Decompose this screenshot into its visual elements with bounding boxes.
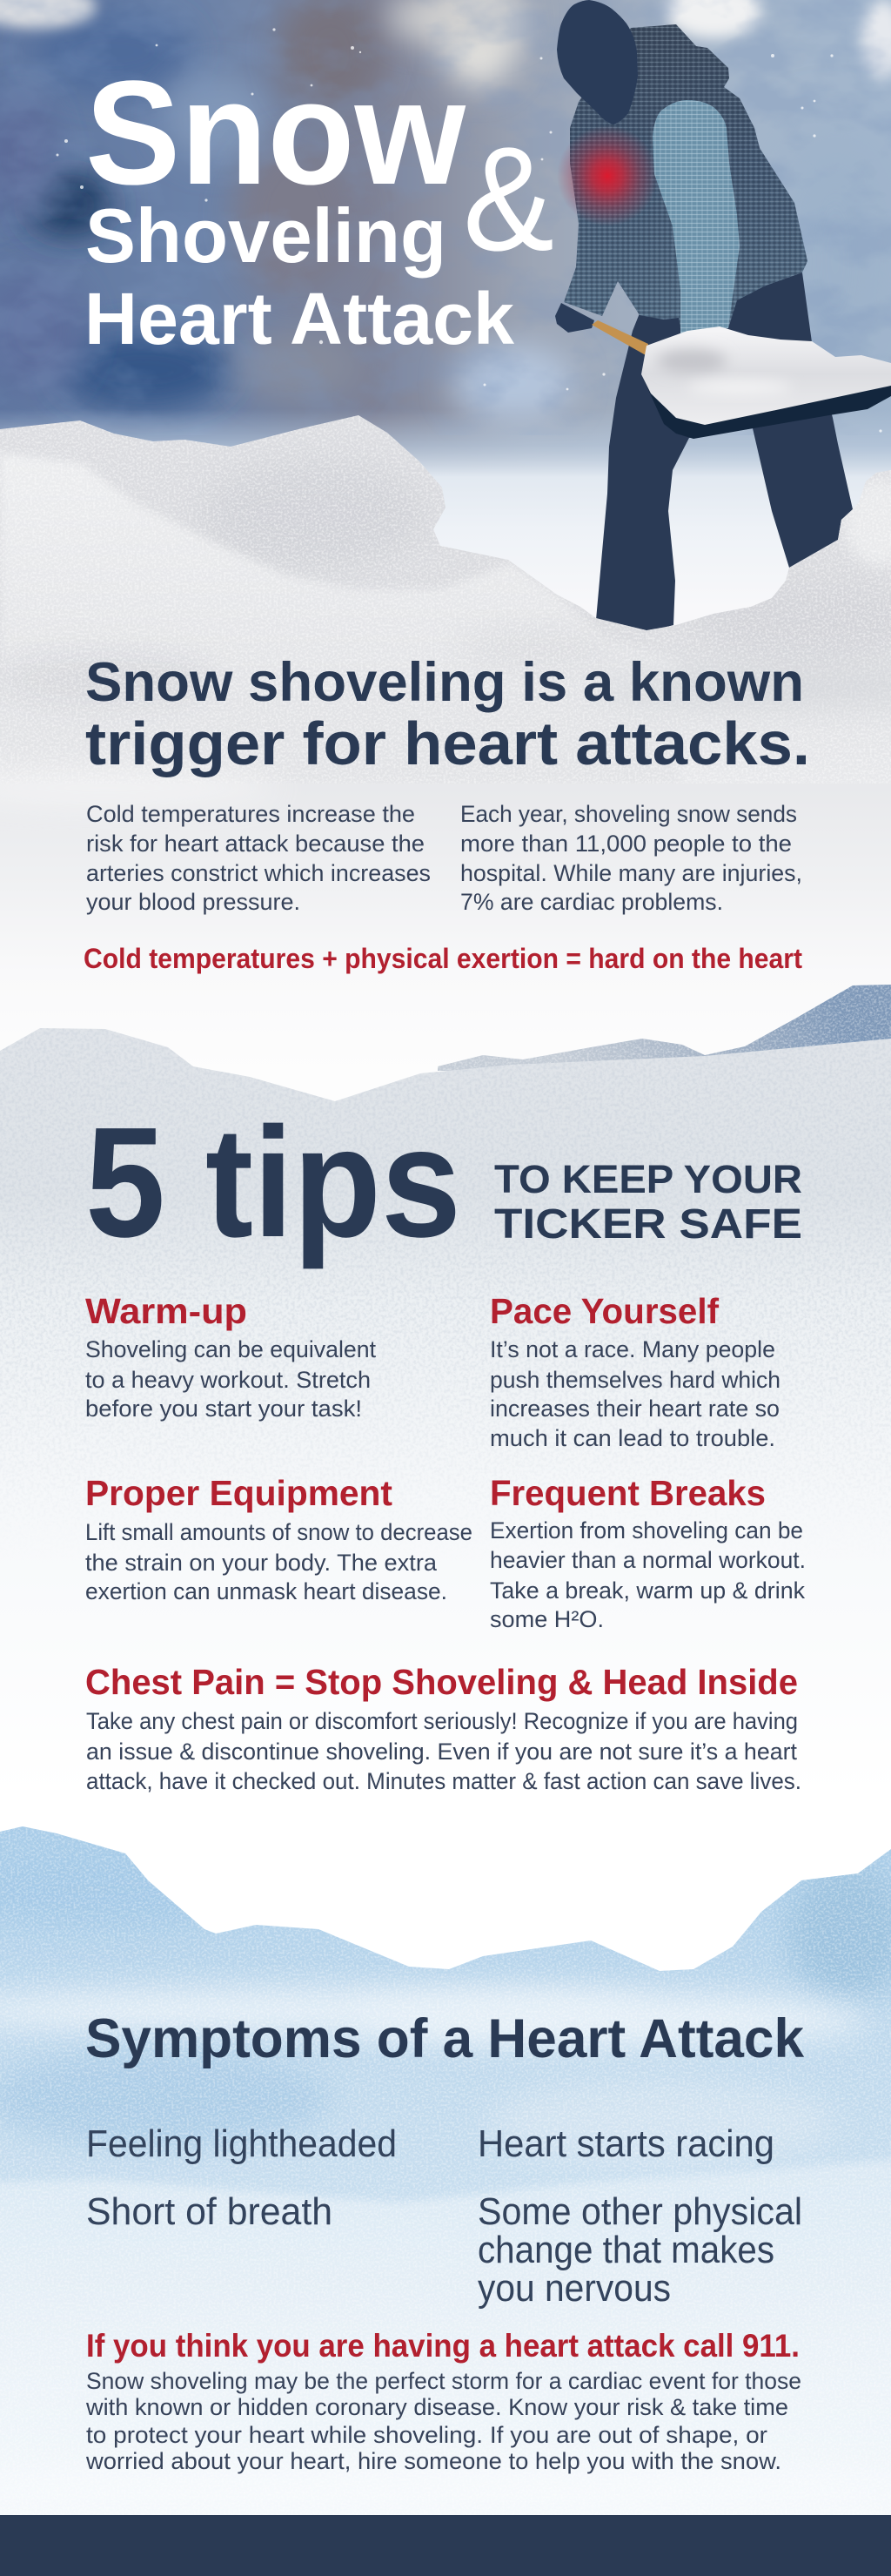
tip: chest pain: attack, have it checked out. Minutes matter & fast action can save lives. (86, 1768, 801, 1794)
tip: warm-up: Warm-up (85, 1291, 247, 1331)
red callout: call 911: If you think you are having a heart attack call 911. (86, 2328, 800, 2364)
text block: perfect storm: Snow shoveling may be the perfect storm for a cardiac event for those (86, 2368, 801, 2394)
tip: pace yourself (490, 1291, 780, 1451)
title: Shoveling (85, 192, 446, 279)
tip: warm-up: Shoveling can be equivalent (85, 1336, 377, 1362)
title (84, 50, 554, 360)
background: blurred winter sky (0, 0, 891, 662)
red callout: equation: Cold temperatures + physical exertion = hard on the heart (84, 943, 802, 974)
heading: symptoms: Symptoms of a Heart Attack (85, 2008, 805, 2069)
tip: pace yourself: It’s not a race. Many people (490, 1336, 775, 1362)
footer bar (0, 2515, 891, 2576)
tip: chest pain: Chest Pain = Stop Shoveling & Head Inside (85, 1662, 798, 1702)
tip: frequent breaks: some H²O. (490, 1606, 604, 1632)
heading: to keep your ticker safe (494, 1157, 802, 1248)
tip: frequent breaks: Take a break, warm up & drink (490, 1577, 806, 1604)
title: Heart Attack (84, 278, 514, 360)
front snow hills (0, 1028, 891, 1560)
tip: proper equipment: Lift small amounts of snow to decrease (85, 1519, 472, 1545)
text block: each year: more than 11,000 people to the (460, 831, 792, 857)
symptoms list: left: Feeling lightheaded (86, 2122, 397, 2165)
back snow hills (438, 985, 891, 1071)
shovel handle (592, 320, 648, 355)
jacket (564, 24, 807, 333)
snowflakes (56, 28, 882, 433)
shovel blade (641, 374, 891, 439)
sleeve (653, 100, 740, 333)
tip: warm-up: to a heavy workout. Stretch (85, 1367, 371, 1393)
symptoms list: right: change that makes (478, 2229, 774, 2271)
symptoms list: right: you nervous (478, 2267, 671, 2310)
text block: perfect storm: with known or hidden coronary disease. Know your risk & take time (85, 2394, 788, 2420)
glove (555, 303, 594, 333)
symptoms list: right (478, 2122, 802, 2310)
text block: perfect storm: to protect your heart while shoveling. If you are out of shape, or (86, 2422, 767, 2448)
tip: proper equipment: Proper Equipment (85, 1473, 392, 1513)
person shoveling snow (555, 0, 891, 632)
symptoms list: right: Heart starts racing (478, 2122, 774, 2165)
heading: known trigger (85, 652, 810, 777)
text block: each year: hospital. While many are injuries, (460, 860, 802, 886)
tip: frequent breaks: heavier than a normal workout. (490, 1547, 806, 1573)
heading: 5 tips: 5 tips (85, 1095, 461, 1270)
snow piles and upper snow field (0, 415, 891, 952)
tip: pace yourself: increases their heart rate so (490, 1396, 780, 1422)
text block: cold temperatures: Cold temperatures increase the (86, 801, 415, 827)
tip: proper equipment: exertion can unmask heart disease. (85, 1578, 447, 1604)
text block: each year: 7% are cardiac problems. (460, 889, 723, 915)
text block: cold temperatures: risk for heart attack because the (86, 831, 425, 857)
pants (596, 272, 853, 632)
shovel snow (641, 326, 891, 425)
tip: proper equipment (85, 1473, 472, 1604)
heading: known trigger: trigger for heart attacks. (85, 710, 810, 777)
text block: each year (460, 801, 802, 915)
tip: chest pain: an issue & discontinue shoveling. Even if you are not sure it’s a heart (86, 1739, 798, 1765)
text block: each year: Each year, shoveling snow sends (460, 801, 797, 827)
hood (557, 0, 638, 124)
text block: cold temperatures: arteries constrict which increases (86, 860, 431, 886)
heading: to keep your ticker safe: TICKER SAFE (494, 1201, 802, 1248)
title: Snow (85, 50, 466, 216)
text block: perfect storm (85, 2368, 801, 2474)
tip: warm-up: before you start your task! (85, 1396, 362, 1422)
tip: frequent breaks: Exertion from shoveling can be (490, 1517, 803, 1544)
tip: frequent breaks: Frequent Breaks (490, 1473, 766, 1513)
text block: cold temperatures: your blood pressure. (86, 889, 300, 915)
tip: warm-up (85, 1291, 377, 1422)
symptoms list: right: Some other physical (478, 2190, 802, 2233)
heading: known trigger: Snow shoveling is a known (85, 652, 804, 713)
symptoms list: left (86, 2122, 397, 2233)
tip: pace yourself: Pace Yourself (490, 1291, 719, 1331)
tip: chest pain (85, 1662, 801, 1794)
heading: to keep your ticker safe: TO KEEP YOUR (494, 1157, 802, 1201)
tip: pace yourself: much it can lead to trouble. (490, 1425, 775, 1451)
tip: pace yourself: push themselves hard which (490, 1367, 780, 1393)
symptoms list: left: Short of breath (86, 2190, 332, 2233)
blue snow section (0, 1826, 891, 2533)
tip: frequent breaks (490, 1473, 806, 1632)
text block: cold temperatures (86, 801, 431, 915)
tip: proper equipment: the strain on your body. The extra (85, 1550, 437, 1576)
tip: chest pain: Take any chest pain or discomfort seriously! Recognize if you are having (86, 1708, 798, 1734)
title: & (463, 117, 554, 282)
chest pain glow (557, 125, 658, 226)
text block: perfect storm: worried about your heart, hire someone to help you with the snow. (85, 2448, 781, 2474)
